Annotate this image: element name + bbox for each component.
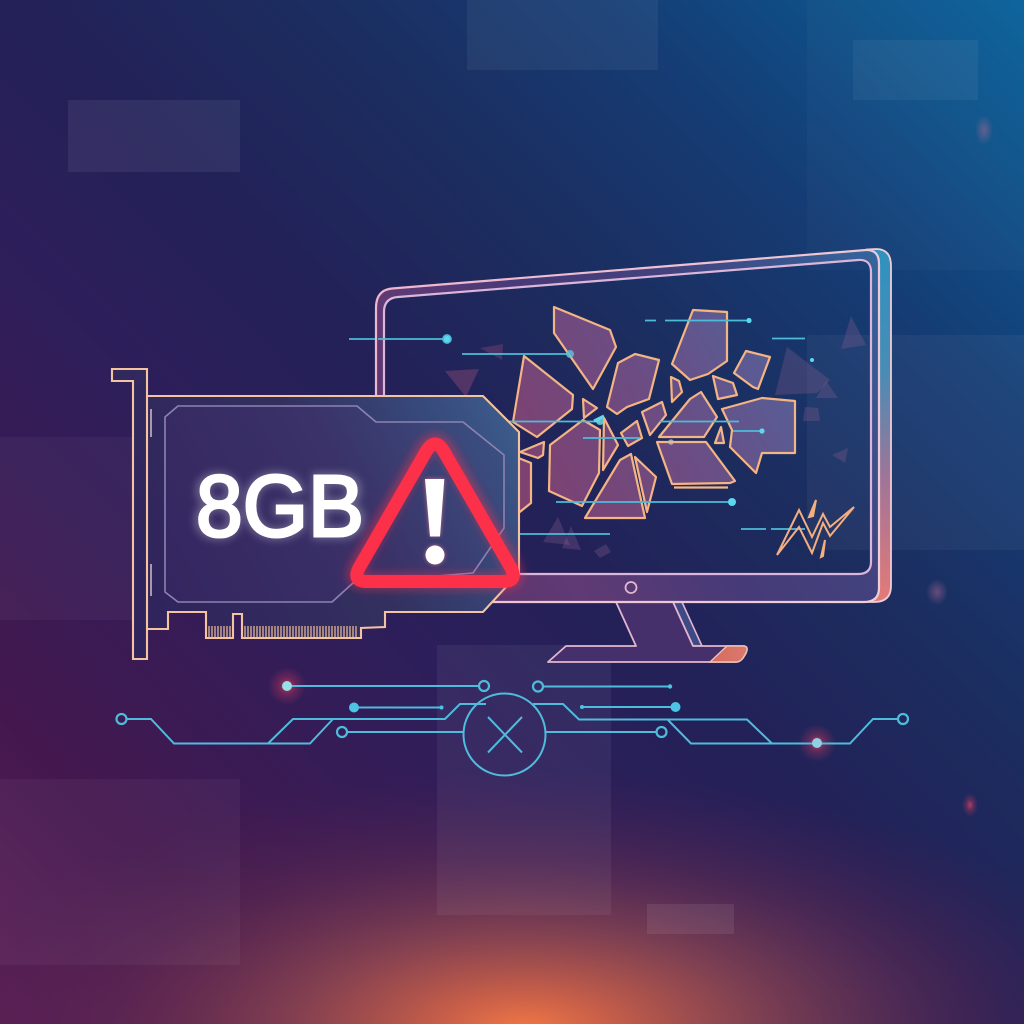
capacity label: 8GB: 8GB xyxy=(196,458,364,555)
exclamation mark xyxy=(425,479,444,564)
monitor side edge xyxy=(862,249,891,602)
ambient glow spots xyxy=(926,115,993,817)
monitor stand xyxy=(548,602,747,662)
capacity label: 8GB: 8GB xyxy=(194,458,366,555)
trace end rings xyxy=(116,681,908,737)
monitor power button xyxy=(626,582,636,593)
fault circle with X xyxy=(464,694,546,776)
shattered screen shards xyxy=(513,307,795,518)
data lines across screen xyxy=(349,318,814,534)
trace nodes xyxy=(282,681,822,748)
PCIe connector pins xyxy=(209,626,356,638)
icon: lightning glitch xyxy=(777,500,854,557)
monitor outline xyxy=(376,250,879,602)
circuit traces xyxy=(116,667,908,776)
graphics card xyxy=(112,369,519,659)
glow nodes xyxy=(268,667,836,762)
icon: warning triangle xyxy=(355,442,515,582)
card inner panel xyxy=(165,406,504,602)
bracket divider xyxy=(146,396,148,629)
faint debris shards xyxy=(445,316,866,558)
bracket slots xyxy=(150,409,152,596)
monitor xyxy=(376,249,891,662)
monitor bezel xyxy=(376,250,879,602)
card body xyxy=(112,369,519,659)
